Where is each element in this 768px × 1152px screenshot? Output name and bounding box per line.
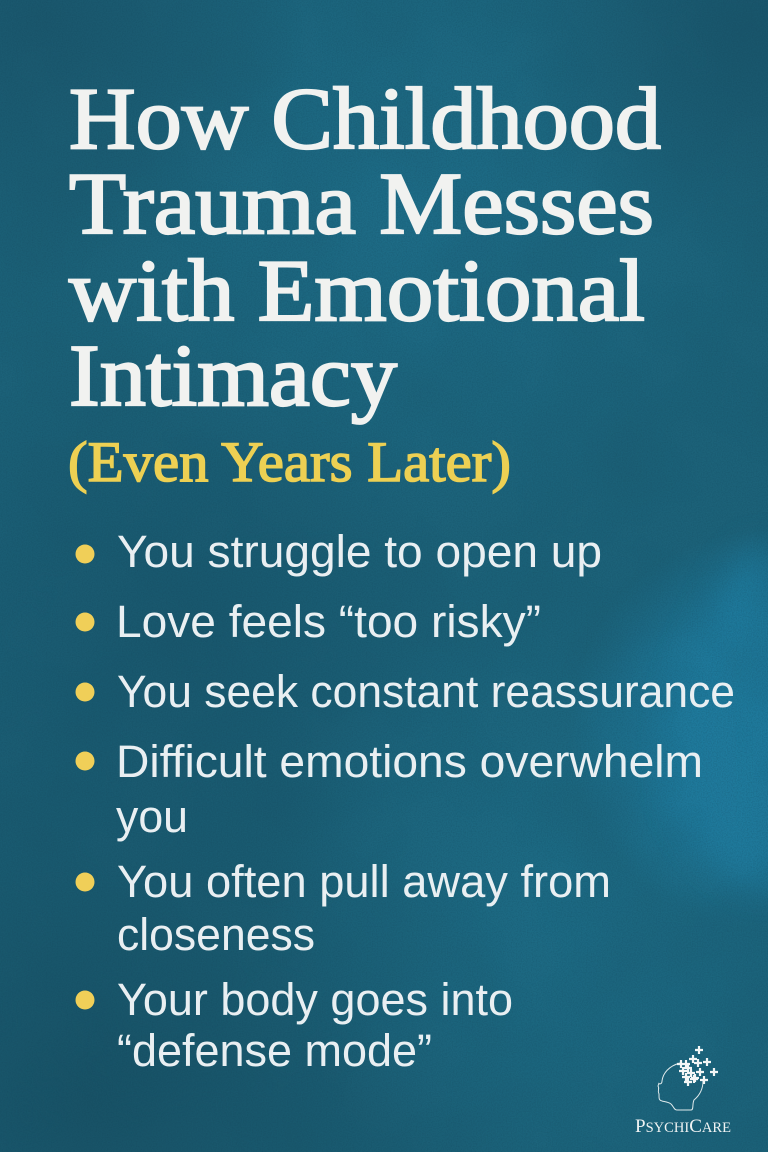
bullet: reassurance: You seek constant reassurance: [117, 666, 735, 717]
logo: PsychiCare: [635, 1046, 731, 1137]
subtitle: (Even Years Later): [68, 431, 511, 494]
title: Intimacy: [69, 328, 397, 425]
bullet: defense mode: “defense mode”: [117, 1025, 432, 1076]
bullet: difficult emotions: Difficult emotions overwhelm: [116, 736, 703, 787]
bullet: difficult emotions: [76, 736, 703, 842]
logo wordmark: PSYCHICARE: [635, 1116, 731, 1137]
bullet: defense mode: Your body goes into: [117, 974, 513, 1025]
bullet list: [76, 526, 735, 1076]
bullet: too risky: Love feels “too risky”: [116, 596, 541, 647]
bullet: open up: You struggle to open up: [117, 526, 602, 577]
bullet: pull away: [76, 856, 611, 960]
title: with Emotional: [69, 243, 645, 340]
bullet: defense mode: [76, 974, 513, 1076]
title: Trauma Messes: [69, 156, 654, 253]
bullet: pull away: You often pull away from: [117, 856, 611, 907]
icon: head with crosses: [658, 1046, 718, 1110]
bullet: pull away: closeness: [117, 909, 315, 960]
bullet: difficult emotions: you: [116, 791, 188, 842]
title: [69, 71, 661, 425]
title: How Childhood: [69, 71, 661, 168]
